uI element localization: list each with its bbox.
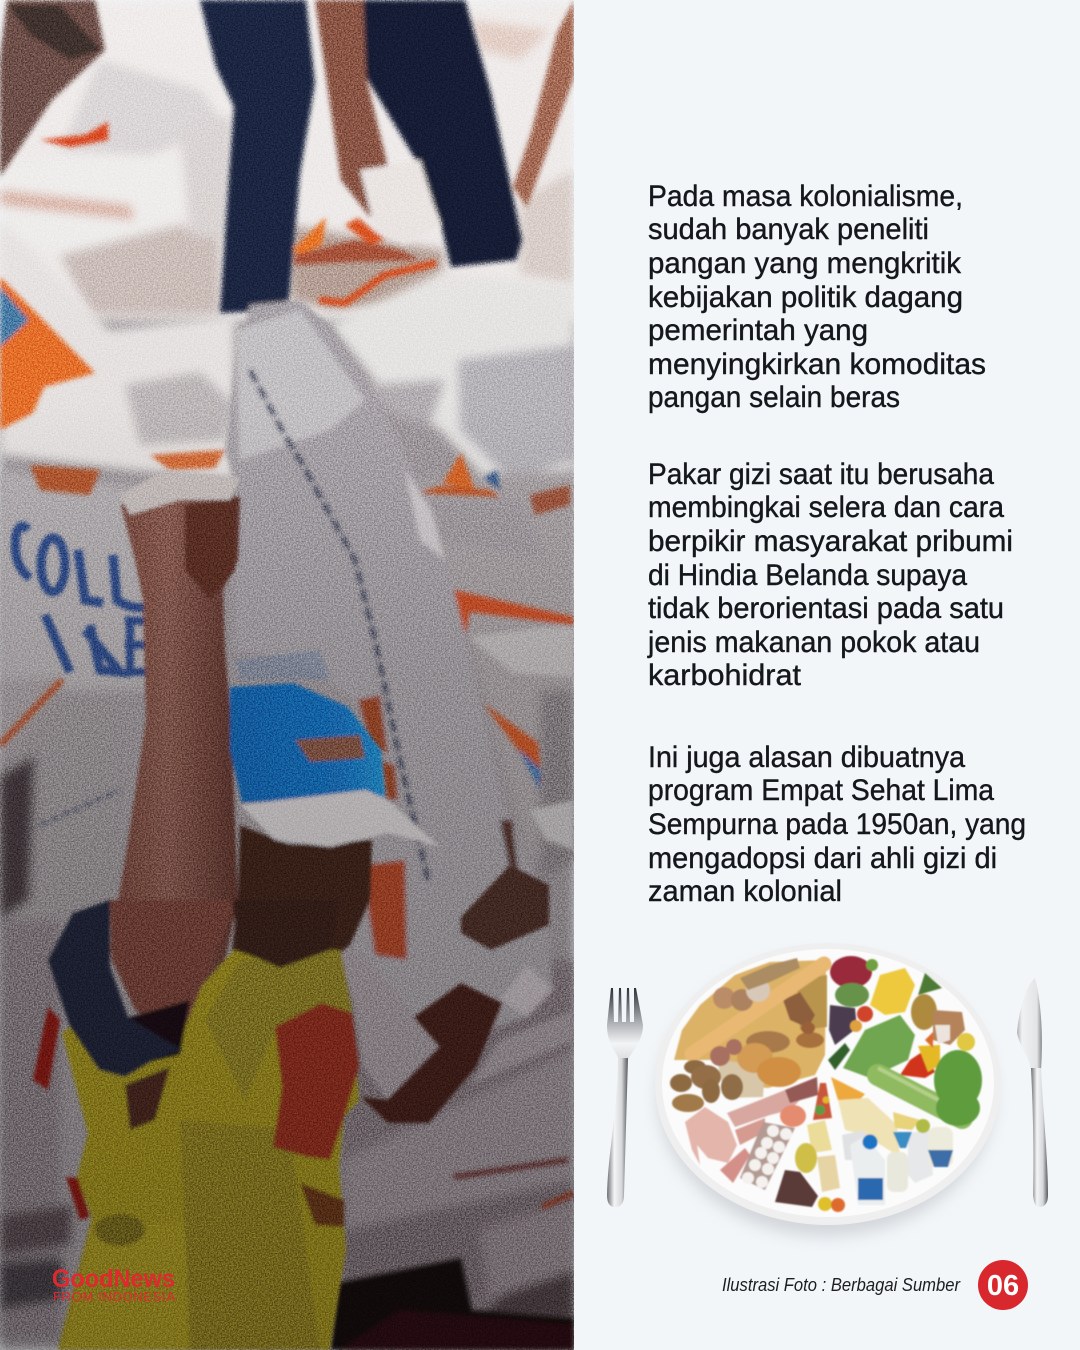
chin shadow	[232, 900, 340, 968]
logo: GoodNews from Indonesia: GoodNews	[52, 1265, 175, 1293]
right sack orange	[443, 453, 476, 493]
jeans	[200, 0, 315, 313]
text block: paragraph 3: zaman kolonial	[648, 875, 842, 908]
text block: paragraph 1: menyingkirkan komoditas	[648, 348, 986, 381]
shirt	[58, 950, 359, 1350]
text block: paragraph 2	[647, 458, 1013, 692]
plate shadow	[658, 956, 994, 1236]
top arm left	[0, 0, 105, 177]
text block: paragraph 2: di Hindia Belanda supaya	[648, 559, 967, 592]
food: fruit	[830, 956, 872, 988]
food: grains and breads	[674, 960, 826, 1088]
food: vegetables	[843, 1015, 915, 1078]
food: chicken	[685, 1107, 737, 1165]
foreground sacks top	[330, 272, 574, 510]
cap	[230, 683, 385, 803]
bulog letters	[15, 526, 155, 672]
bunched sack top over fist	[120, 470, 240, 515]
sleeve	[48, 900, 183, 1077]
photo grain	[0, 0, 574, 1350]
orange patches on the big sack	[358, 695, 388, 755]
text block: paragraph 2: membingkai selera dan cara	[648, 491, 1004, 524]
right sacks	[403, 470, 574, 860]
sack print lines	[250, 370, 428, 880]
text block: paragraph 1: pangan selain beras	[648, 381, 900, 414]
bulog sack	[0, 470, 160, 690]
text block: paragraph 3: mengadopsi dari ahli gizi di	[648, 842, 997, 875]
red streaks on right sacks	[454, 1160, 568, 1177]
food: fish and meat	[727, 1077, 818, 1127]
left gray	[0, 690, 125, 1000]
orange accents top	[40, 122, 108, 147]
shirt print	[273, 1003, 359, 1160]
text block: paragraph 1: Pada masa kolonialisme,	[648, 180, 963, 213]
second hand	[461, 865, 549, 950]
shirt hole	[125, 1067, 170, 1130]
photo: worker carrying rice sack	[0, 0, 574, 1350]
top white sacks	[0, 0, 574, 320]
text block: paragraph 2: tidak berorientasi pada satu	[648, 592, 1004, 625]
forearm	[361, 983, 502, 1123]
text block: paragraph 1: sudah banyak peneliti	[648, 213, 929, 246]
shoulder skin	[110, 900, 238, 1040]
food: eggs	[740, 1122, 795, 1190]
face	[232, 825, 372, 968]
icon: fork	[607, 988, 643, 1207]
logo: GoodNews from Indonesia: FROM INDONESIA	[53, 1289, 175, 1304]
food: sweets and oil	[813, 1083, 832, 1120]
cap brim	[240, 790, 440, 847]
arm mid	[315, 0, 388, 217]
text block: paragraph 1: pemerintah yang	[648, 314, 868, 347]
red straps	[33, 1007, 60, 1090]
food: potatoes	[672, 1094, 704, 1112]
page number badge	[978, 1260, 1028, 1310]
text block: paragraph 3: program Empat Sehat Lima	[648, 774, 994, 807]
right lower sacks	[340, 960, 574, 1350]
text block: paragraph 1: kebijakan politik dagang	[648, 281, 963, 314]
photo shading	[0, 0, 574, 1350]
text block: paragraph 2: karbohidrat	[648, 659, 802, 692]
text block: paragraph 1	[648, 180, 986, 414]
text block: paragraph 3: Sempurna pada 1950an, yang	[648, 808, 1026, 841]
left orange stripes	[0, 277, 95, 430]
food: cheese and dairy	[831, 1077, 865, 1105]
plate with food groups	[655, 943, 1001, 1236]
plate	[655, 943, 1001, 1225]
photo credit: Ilustrasi Foto : Berbagai Sumber	[722, 1275, 961, 1295]
text block: paragraph 3	[648, 741, 1026, 908]
text block: paragraph 2: berpikir masyarakat pribumi	[648, 525, 1013, 558]
big shouldered sack	[225, 300, 553, 1047]
arm right	[513, 0, 574, 207]
text block: paragraph 1: pangan yang mengkritik	[648, 247, 962, 280]
text block: paragraph 3: Ini juga alasan dibuatnya	[648, 741, 965, 774]
icon: knife	[1017, 978, 1048, 1207]
text block: paragraph 2: jenis makanan pokok atau	[647, 626, 980, 659]
logo: GoodNews from Indonesia	[52, 1265, 175, 1304]
dark ground	[330, 1258, 574, 1350]
raised fist and arm	[110, 497, 240, 990]
text block: paragraph 2: Pakar gizi saat itu berusaha	[648, 458, 994, 491]
page number badge: 06	[987, 1270, 1019, 1302]
